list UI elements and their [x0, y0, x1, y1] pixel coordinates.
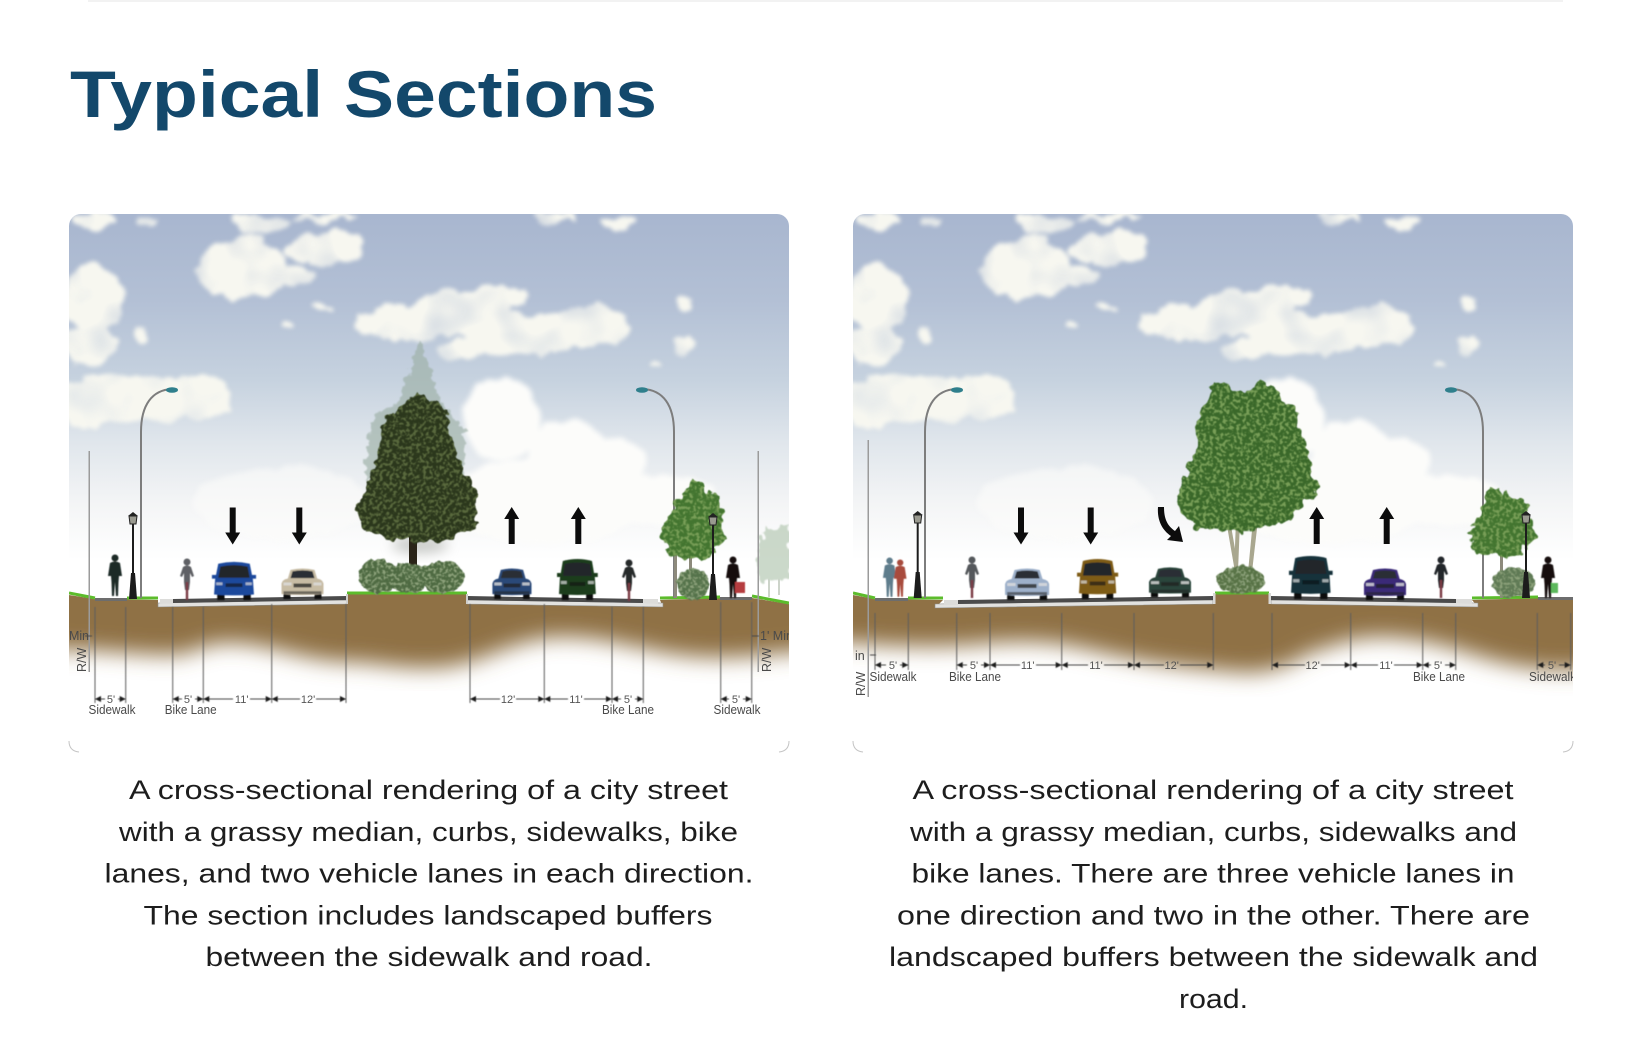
- dimension labels: 11': [1089, 660, 1103, 672]
- dimension labels: Bike Lane: [949, 670, 1001, 684]
- clouds: [44, 213, 715, 543]
- dimension labels: 5': [970, 660, 978, 672]
- caption: A cross-sectional rendering of a city street: [129, 775, 729, 805]
- median tree: [1175, 378, 1317, 572]
- lamp heads: [951, 387, 1457, 393]
- panel: section with two lanes each way: [40, 213, 820, 972]
- caption: A cross-sectional rendering of a city street: [912, 775, 1514, 805]
- road surfaces: [158, 594, 663, 607]
- dimension labels: 5': [889, 660, 897, 672]
- dimension labels: Sidewalk: [870, 670, 917, 684]
- title: Typical Sections: [70, 57, 657, 131]
- dimension labels: Sidewalk: [714, 703, 761, 717]
- caption: [104, 775, 754, 972]
- dimension lines: [85, 602, 759, 703]
- dimension labels: 12': [301, 694, 315, 706]
- street lamps: [925, 389, 1483, 598]
- caption: [889, 775, 1538, 1014]
- dimension labels: 11': [1021, 660, 1034, 672]
- dimension labels: Sidewalk: [88, 703, 136, 717]
- right of way labels: R/W: [75, 648, 89, 672]
- lamp heads: [166, 387, 648, 393]
- image: right street rendering: [853, 214, 1573, 697]
- right of way labels: 1' Min: [760, 629, 793, 643]
- dimension labels: Bike Lane: [602, 703, 654, 717]
- sidewalks: [875, 597, 1573, 601]
- right of way labels: in: [855, 649, 865, 663]
- dimension labels: 12': [1165, 660, 1179, 672]
- lanterns: [913, 511, 1531, 598]
- dimension labels: [870, 660, 1577, 684]
- caption: bike lanes. There are three vehicle lanes in: [912, 859, 1514, 889]
- ground: [69, 594, 789, 686]
- right of way labels: Min: [69, 629, 89, 643]
- vehicles: [1005, 556, 1406, 600]
- right buffer tree: [660, 481, 727, 600]
- ground: [853, 594, 1573, 690]
- caption: road.: [1179, 984, 1248, 1014]
- dimension labels: 5': [624, 694, 632, 706]
- right of way line: [868, 440, 869, 697]
- caption: lanes, and two vehicle lanes in each direction.: [104, 859, 754, 889]
- dimension labels: Sidewalk: [1529, 670, 1577, 684]
- direction arrows: [1014, 507, 1394, 544]
- sky: [853, 214, 1573, 520]
- dimension labels: 5': [1548, 660, 1556, 672]
- dimension labels: 5': [732, 694, 740, 706]
- caption: one direction and two in the other. There are: [897, 900, 1530, 930]
- image bottom corners: [853, 741, 1573, 752]
- lanterns: [128, 512, 718, 600]
- dimension labels: 11': [1379, 660, 1393, 672]
- caption: landscaped buffers between the sidewalk and: [889, 942, 1538, 972]
- dimension labels: Bike Lane: [1413, 670, 1465, 684]
- right buffer tree: [1468, 486, 1536, 598]
- right of way lines: [88, 451, 759, 672]
- clouds: [853, 214, 1496, 504]
- dimension labels: 5': [184, 694, 192, 706]
- far background tree: [755, 523, 792, 597]
- caption: with a grassy median, curbs, sidewalks and: [909, 817, 1517, 847]
- people and cyclists: [883, 556, 1558, 598]
- dimension labels: 5': [107, 694, 115, 706]
- grass: [69, 593, 789, 603]
- street lamps: [141, 389, 674, 598]
- right of way labels: R/W: [854, 672, 868, 696]
- grass: [853, 593, 1538, 598]
- dimension labels: Bike Lane: [165, 703, 217, 717]
- image bottom corners: [69, 741, 789, 752]
- dimension labels: [89, 696, 760, 714]
- direction arrows: [225, 507, 586, 544]
- sidewalks: [95, 597, 752, 601]
- vehicles: [212, 559, 598, 600]
- top divider: [88, 0, 1563, 2]
- right of way labels: [69, 629, 793, 672]
- right of way labels: R/W: [760, 648, 774, 672]
- caption: between the sidewalk and road.: [206, 942, 652, 972]
- people and cyclists: [108, 554, 745, 601]
- sky: [69, 214, 789, 520]
- right of way labels: [854, 649, 868, 696]
- dimension lines: [870, 613, 1571, 670]
- road surfaces: [935, 593, 1478, 608]
- dimension labels: 11': [569, 694, 583, 706]
- image: left street rendering: [69, 214, 789, 714]
- median shrub: [1217, 566, 1265, 594]
- caption: with a grassy median, curbs, sidewalks, bike: [118, 817, 738, 847]
- median shrubs: [358, 559, 464, 593]
- dimension labels: 5': [1434, 660, 1442, 672]
- dimension labels: 11': [235, 694, 248, 706]
- panel: section with three lanes one way and two the other: [820, 213, 1600, 1014]
- dimension labels: 12': [1306, 660, 1320, 672]
- dimension labels: 12': [501, 694, 515, 706]
- median tree: [355, 339, 478, 566]
- caption: The section includes landscaped buffers: [144, 900, 712, 930]
